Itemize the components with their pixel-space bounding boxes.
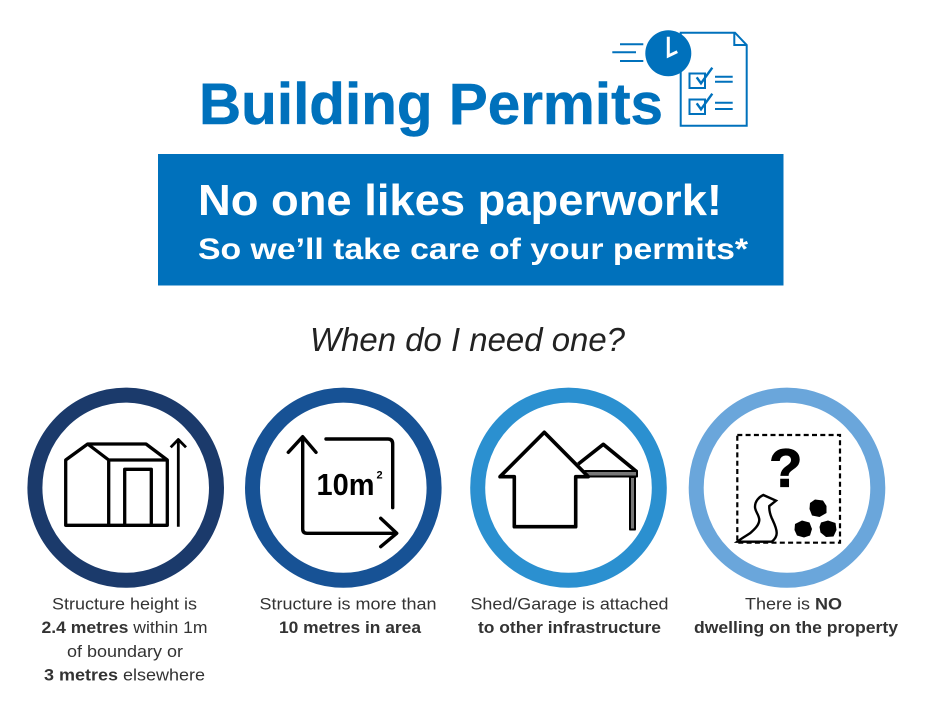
- panel: attached structure: [470, 395, 668, 637]
- caption: no dwelling: [694, 594, 899, 637]
- caption: no dwelling: There is NO: [745, 594, 842, 613]
- caption: height: of boundary or: [67, 642, 183, 661]
- caption: attached: to other infrastructure: [478, 618, 661, 637]
- banner subheading: So we’ll take care of your permits*: [198, 233, 748, 266]
- caption: height: 3 metres elsewhere: [44, 666, 205, 684]
- icon: vacant property with question mark: ?: [769, 438, 802, 498]
- caption: attached: [470, 594, 668, 637]
- icon: vacant property with question mark: [696, 395, 878, 580]
- icon: 10 square metre area: 2: [376, 470, 383, 482]
- title: Building Permits: [199, 72, 663, 137]
- icon: checklist with clock: [612, 30, 747, 126]
- panel: height requirement: [35, 395, 216, 684]
- caption: height: [42, 594, 208, 684]
- banner headline: No one likes paperwork!: [198, 176, 722, 225]
- caption: area: [260, 594, 436, 637]
- banner: [158, 154, 784, 286]
- caption: height: Structure height is: [52, 594, 197, 613]
- caption: area: 10 metres in area: [279, 618, 422, 637]
- icon: shed with height arrow: [35, 395, 216, 580]
- section heading: When do I need one?: [310, 321, 626, 358]
- icon: house with attached garage: [478, 395, 659, 580]
- caption: area: Structure is more than: [260, 594, 436, 613]
- icon: 10 square metre area: [252, 395, 434, 580]
- caption: height: 2.4 metres within 1m: [42, 618, 208, 637]
- caption: attached: Shed/Garage is attached: [470, 594, 668, 613]
- panel: area requirement: [252, 395, 436, 637]
- caption: no dwelling: dwelling on the property: [694, 618, 899, 637]
- icon: 10 square metre area: 10m: [316, 467, 374, 502]
- panel: no dwelling: [694, 395, 899, 637]
